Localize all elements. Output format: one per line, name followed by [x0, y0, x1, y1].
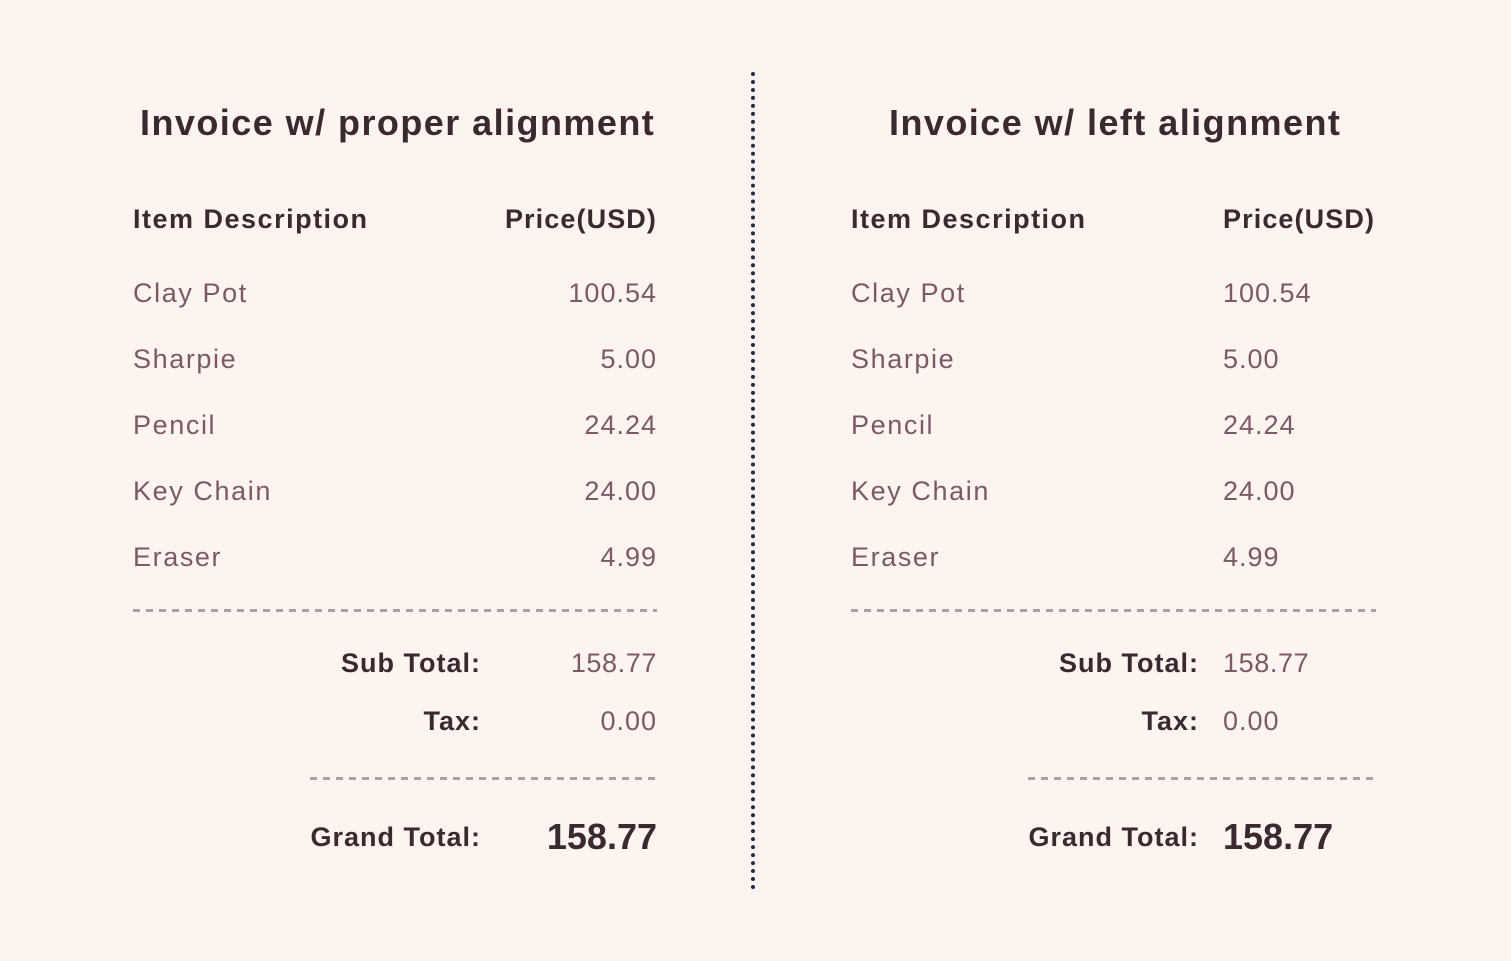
item rows left: Eraser: [133, 542, 222, 572]
item rows right: 24.24: [1223, 410, 1296, 440]
item rows right: 24.00: [1223, 476, 1296, 506]
header row left: [133, 204, 657, 234]
header row left: Item Description: [133, 204, 369, 234]
totals left: 158.77: [571, 648, 657, 678]
item rows left: [133, 278, 657, 572]
title right: Invoice w/ left alignment: [889, 102, 1341, 143]
divider: vertical dotted line: [751, 72, 755, 890]
item rows left: 24.00: [584, 476, 657, 506]
title left: Invoice w/ proper alignment: [140, 102, 655, 143]
item rows right: Sharpie: [851, 344, 955, 374]
totals right: 158.77: [1223, 816, 1333, 857]
totals right: Sub Total:: [1059, 648, 1199, 678]
totals left: 158.77: [547, 816, 657, 857]
totals left: Sub Total:: [341, 648, 481, 678]
item rows right: 5.00: [1223, 344, 1280, 374]
panel: left alignment invoice: [851, 102, 1376, 857]
totals right: Tax:: [1141, 706, 1199, 736]
item rows left: 24.24: [584, 410, 657, 440]
totals left: Grand Total:: [310, 822, 481, 852]
item rows left: Sharpie: [133, 344, 237, 374]
totals right: [1028, 648, 1333, 857]
item rows right: Eraser: [851, 542, 940, 572]
item rows left: 5.00: [600, 344, 657, 374]
item rows right: Clay Pot: [851, 278, 966, 308]
item rows left: 4.99: [600, 542, 657, 572]
header row left: Price(USD): [505, 204, 657, 234]
totals left: 0.00: [600, 706, 657, 736]
item rows left: Key Chain: [133, 476, 272, 506]
item rows right: Pencil: [851, 410, 934, 440]
header row right: Price(USD): [1223, 204, 1375, 234]
item rows left: Pencil: [133, 410, 216, 440]
totals left: [310, 648, 657, 857]
totals left: Tax:: [423, 706, 481, 736]
header row right: [851, 204, 1375, 234]
item rows right: 4.99: [1223, 542, 1280, 572]
panel: proper alignment invoice: [133, 102, 657, 857]
item rows right: 100.54: [1223, 278, 1312, 308]
totals right: Grand Total:: [1028, 822, 1199, 852]
totals right: 0.00: [1223, 706, 1280, 736]
item rows left: 100.54: [568, 278, 657, 308]
item rows right: Key Chain: [851, 476, 990, 506]
header row right: Item Description: [851, 204, 1087, 234]
item rows left: Clay Pot: [133, 278, 248, 308]
totals right: 158.77: [1223, 648, 1309, 678]
item rows right: [851, 278, 1312, 572]
